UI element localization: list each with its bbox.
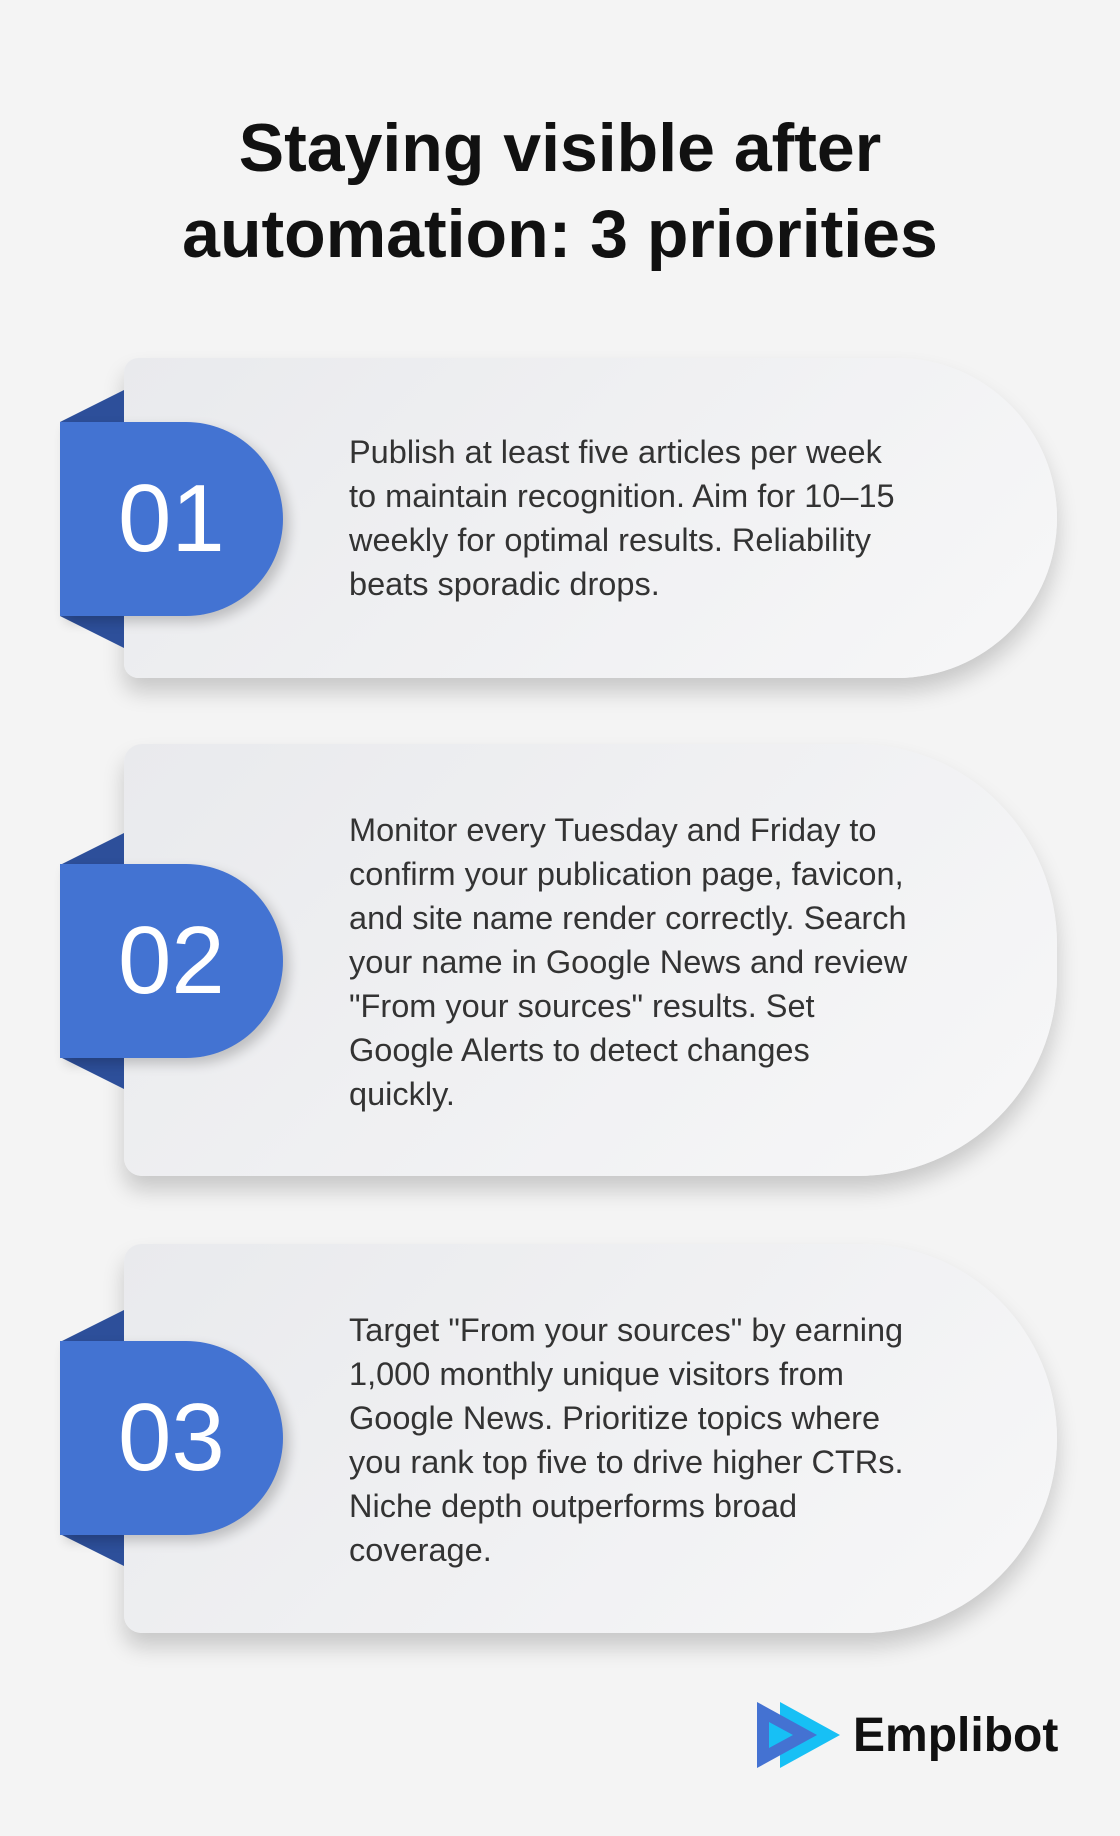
text block 3: 1,000 monthly unique visitors from <box>349 1356 844 1392</box>
text block 2: quickly. <box>349 1076 455 1112</box>
text block 3: Target "From your sources" by earning <box>349 1312 903 1348</box>
fold top 1 <box>60 390 124 422</box>
text block 2: and site name render correctly. Search <box>349 900 907 936</box>
brand name: Emplibot <box>853 1709 1058 1762</box>
text block 2: Monitor every Tuesday and Friday to <box>349 812 876 848</box>
text block 2: confirm your publication page, favicon, <box>349 856 904 892</box>
badge 01: 01 <box>118 465 225 572</box>
text block 2 <box>349 812 908 1112</box>
badge 02 <box>60 864 283 1058</box>
text block 1: to maintain recognition. Aim for 10–15 <box>349 478 895 514</box>
panel: priority 3 <box>124 1244 1057 1633</box>
text block 3 <box>349 1312 904 1568</box>
badge 01 <box>60 422 283 616</box>
fold bottom 3 <box>62 1535 124 1566</box>
text block 3: Niche depth outperforms broad <box>349 1488 797 1524</box>
text block 2: Google Alerts to detect changes <box>349 1032 810 1068</box>
badge 02: 02 <box>118 907 225 1014</box>
fold bottom 1 <box>60 616 124 648</box>
text block 1: beats sporadic drops. <box>349 566 660 602</box>
fold bottom 2 <box>62 1058 124 1089</box>
text block 2: your name in Google News and review <box>349 944 907 980</box>
badge 03 <box>60 1341 283 1535</box>
title: Staying visible after <box>239 110 881 186</box>
text block 2: "From your sources" results. Set <box>349 988 815 1024</box>
text block 3: Google News. Prioritize topics where <box>349 1400 880 1436</box>
title <box>182 110 938 272</box>
panel: priority 1 <box>124 358 1057 678</box>
text block 1: Publish at least five articles per week <box>349 434 882 470</box>
text block 3: coverage. <box>349 1532 492 1568</box>
title: automation: 3 priorities <box>182 196 938 272</box>
text block 1: weekly for optimal results. Reliability <box>349 522 871 558</box>
badge 03: 03 <box>118 1384 225 1491</box>
text block 3: you rank top five to drive higher CTRs. <box>349 1444 904 1480</box>
fold top 2 <box>62 833 124 864</box>
logo <box>757 1702 1058 1768</box>
fold top 3 <box>62 1310 124 1341</box>
text block 1 <box>349 434 895 602</box>
icon: play arrows <box>757 1702 840 1768</box>
panel: priority 2 <box>124 744 1057 1176</box>
